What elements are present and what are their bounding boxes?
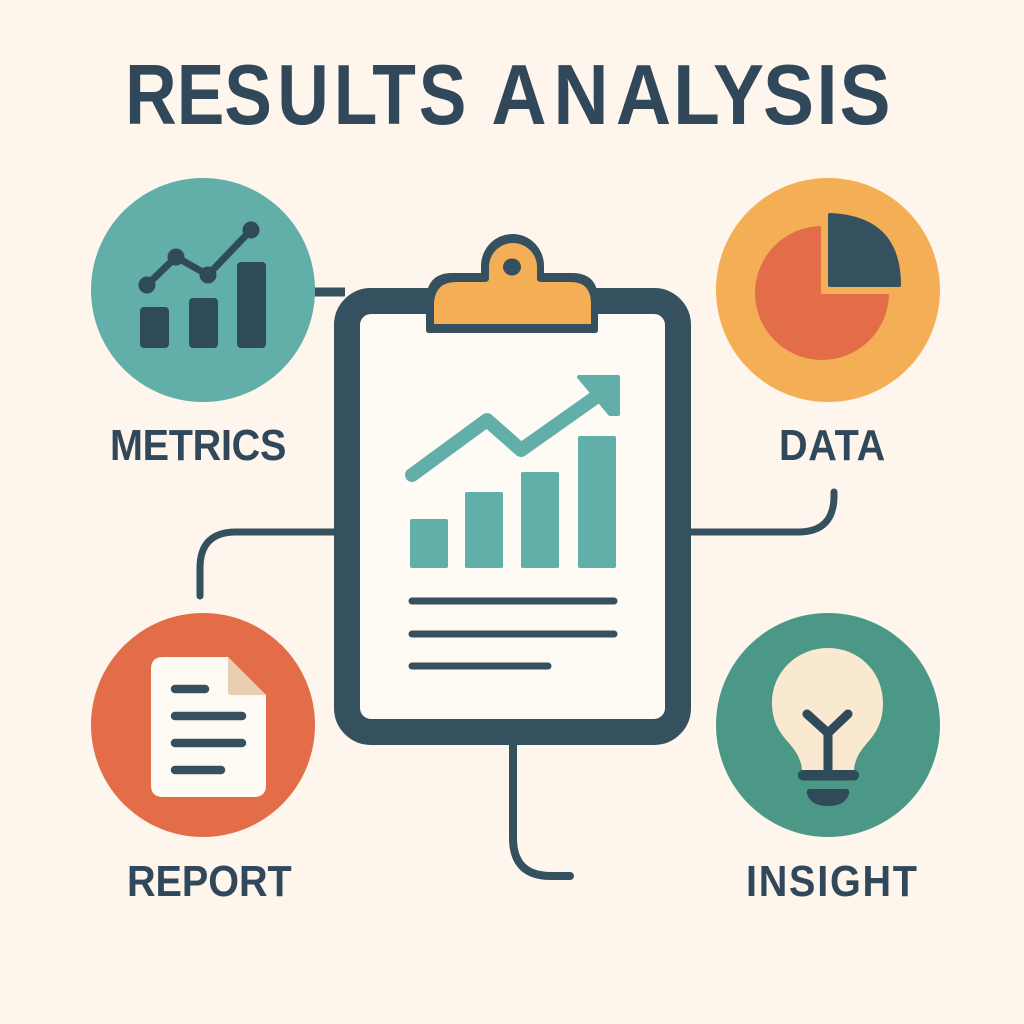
panel: insight (716, 613, 940, 905)
title: RESULTS (125, 47, 466, 142)
clipboard board (347, 301, 678, 732)
clip hole (503, 258, 521, 276)
icon: pie slice large (755, 226, 889, 360)
icon: light bulb (772, 648, 883, 806)
clipboard (347, 234, 678, 732)
connector: clipboard bottom (513, 740, 570, 876)
title (125, 47, 891, 143)
icon: metrics bars (140, 262, 266, 348)
text lines (412, 601, 614, 666)
insight circle (716, 613, 940, 837)
icon: document (151, 657, 266, 797)
panel: data (716, 178, 940, 469)
panel: metrics (91, 178, 315, 469)
clipboard clip (426, 234, 598, 333)
metrics circle (91, 178, 315, 402)
report bar chart (410, 436, 616, 568)
connector: data to clipboard (685, 492, 834, 532)
panel: report (91, 613, 315, 905)
data label: DATA (779, 420, 885, 469)
metrics label: METRICS (110, 420, 286, 469)
icon: pie slice small (830, 215, 899, 285)
title: ANALYSIS (491, 48, 891, 143)
connector: report to clipboard (200, 532, 340, 596)
data circle (716, 178, 940, 402)
report circle (91, 613, 315, 837)
trend arrow (412, 377, 618, 475)
report label: REPORT (127, 856, 292, 905)
insight label: INSIGHT (746, 856, 917, 905)
icon: metrics line (138, 222, 260, 294)
connector: metrics to clipboard (310, 288, 345, 296)
